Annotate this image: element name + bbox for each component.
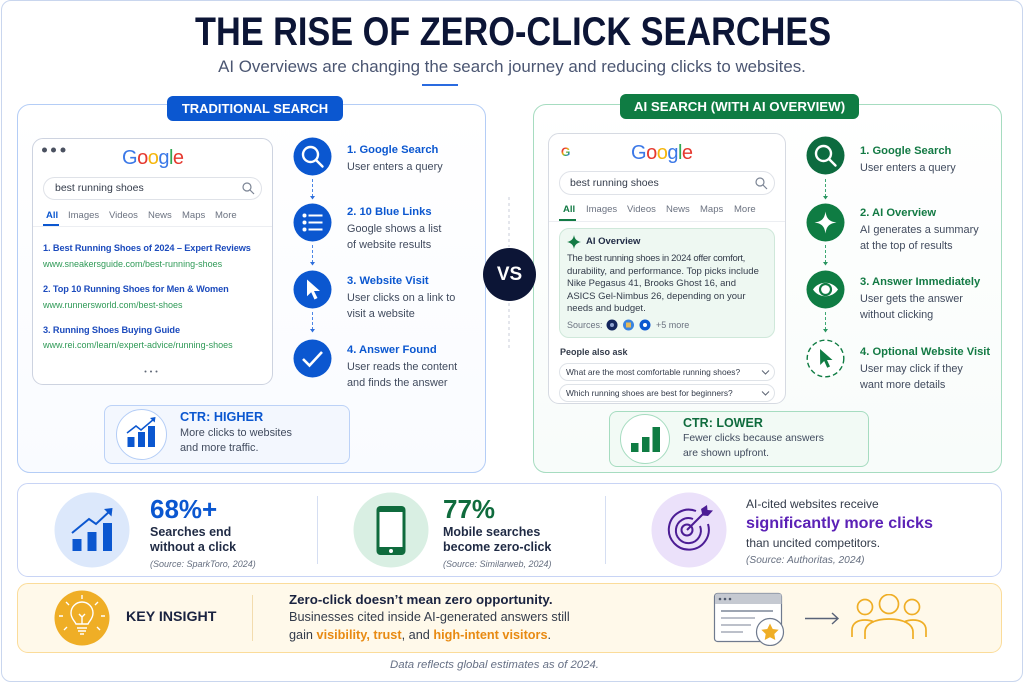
stat: 77%: become zero-click (443, 540, 551, 554)
stat: AI-cited clicks: (Source: Authoritas, 2024) (746, 555, 865, 566)
search box (43, 177, 262, 200)
subtitle: AI Overviews are changing the search journey and reducing clicks to websites. (218, 57, 806, 76)
step 4 text: 4. Answer Found (347, 344, 437, 356)
step 1 text (347, 144, 443, 173)
insight text: gain visibility, trust, and high-intent visitors. (289, 628, 551, 642)
stat: AI-cited clicks: significantly more clicks (746, 514, 933, 532)
step 3 text: 3. Website Visit (347, 275, 429, 287)
icon: AI step 4 optional cursor (806, 340, 844, 378)
results list: www.sneakersguide.com/best-running-shoes (43, 259, 222, 269)
AI step 1 text (860, 145, 956, 174)
sources row: Sources: (567, 320, 603, 330)
stat: AI-cited clicks (746, 497, 946, 567)
question 1: What are the most comfortable running shoes? (566, 367, 740, 377)
step 4 text: and finds the answer (347, 377, 448, 389)
CTR higher text: and more traffic. (180, 442, 258, 454)
icon: target (652, 492, 726, 568)
tabs: Maps (182, 210, 205, 221)
AI step 2 text: 2. AI Overview (860, 207, 936, 219)
results list: 1. Best Running Shoes of 2024 – Expert Reviews (43, 243, 251, 253)
AI overview card (559, 228, 775, 338)
AI overview text: needs and budget. (567, 303, 646, 314)
tabs: News (148, 210, 172, 221)
AI overview text: The best running shoes in 2024 offer comfort, (567, 253, 745, 264)
CTR lower text: Fewer clicks because answers (683, 433, 824, 444)
stat: AI-cited clicks: AI-cited websites receive (746, 497, 879, 511)
tabs: All (563, 204, 575, 215)
stat divider (605, 496, 606, 564)
step 1 text: 1. Google Search (347, 144, 438, 156)
results list: www.runnersworld.com/best-shoes (43, 300, 183, 310)
stat: 68%: Searches end (150, 525, 231, 539)
AI step 4 text: User may click if they (860, 363, 963, 375)
step 3 text: User clicks on a link to (347, 292, 455, 304)
step 4 text (347, 344, 458, 389)
icon: AI step 2 sparkle (806, 204, 844, 242)
icon: window dots (42, 148, 66, 152)
heading: AI search (620, 94, 859, 119)
icon: step 1 search (294, 138, 332, 176)
CTR higher text: More clicks to websites (180, 427, 292, 439)
VS divider line (508, 197, 510, 348)
VS badge (483, 248, 536, 301)
search box (559, 171, 775, 195)
heading: AI search: AI SEARCH (WITH AI OVERVIEW) (634, 99, 845, 114)
callout: CTR higher (104, 405, 350, 464)
Google logo: Google (122, 147, 184, 169)
VS badge: VS (497, 264, 522, 285)
AI step 3 text: User gets the answer (860, 293, 963, 305)
icon: AI step 1 search (806, 136, 844, 174)
insight text: Businesses cited inside AI-generated answers still (289, 610, 570, 624)
panel: key insight (17, 583, 1002, 653)
stat: 68%: 68%+ (150, 494, 217, 524)
panel: AI browser mockup (548, 133, 786, 404)
results list: www.rei.com/learn/expert-advice/running-shoes (43, 340, 233, 350)
results list: 3. Running Shoes Buying Guide (43, 325, 180, 335)
insight text: Zero-click doesn’t mean zero opportunity. (289, 592, 553, 607)
AI step 4 text (860, 346, 990, 391)
insight text (289, 593, 589, 645)
tabs: Maps (700, 204, 723, 215)
AI step 2 text (860, 207, 979, 252)
AI overview heading: AI Overview (586, 236, 640, 247)
icon: step 4 check (294, 340, 332, 378)
sources row: +5 more (656, 320, 689, 330)
AI step 3 text: 3. Answer Immediately (860, 276, 980, 288)
search query: best running shoes (55, 182, 144, 194)
icon: step 3 cursor (294, 270, 332, 308)
icon: small search (755, 177, 768, 190)
insight divider (252, 595, 253, 641)
stat: 77%: 77% (443, 494, 495, 524)
AI step 1 text: 1. Google Search (860, 145, 951, 157)
tabs: Images (586, 204, 617, 215)
icon: rising chart (116, 409, 167, 460)
AI step 4 text: 4. Optional Website Visit (860, 346, 990, 358)
icon: audience (849, 594, 929, 640)
stat: 77%: (Source: Similarweb, 2024) (443, 559, 552, 569)
question 2 (559, 384, 775, 402)
step 2 text (347, 206, 442, 251)
AI step 1 text: User enters a query (860, 162, 956, 174)
step 3 text: visit a website (347, 308, 415, 320)
step 2 text: Google shows a list (347, 223, 441, 235)
step 2 text: 2. 10 Blue Links (347, 206, 432, 218)
panel: statistics (17, 483, 1002, 577)
step 1 text: User enters a query (347, 161, 443, 173)
AI overview text: Nike Pegasus 41, Brooks Ghost 16, and (567, 278, 736, 289)
icon: small G: G (561, 145, 570, 159)
icon: AI star small (567, 235, 581, 249)
sources row (567, 320, 689, 330)
results list (43, 243, 251, 350)
tabs: More (215, 210, 237, 221)
stat: 68%: (Source: SparkToro, 2024) (150, 559, 256, 569)
AI step connectors (823, 179, 828, 332)
title accent line (422, 84, 458, 86)
icon: stat chart (54, 492, 130, 568)
AI step 2 text: AI generates a summary (860, 224, 979, 236)
question 2: Which running shoes are best for beginners? (566, 388, 733, 398)
traditional step connectors (310, 179, 315, 332)
tabs: Videos (627, 204, 656, 215)
step 2 text: of website results (347, 239, 431, 251)
tabs: News (666, 204, 690, 215)
AI step 3 text (860, 276, 980, 321)
stat: 77%: Mobile searches (443, 525, 540, 539)
step 3 text (347, 275, 455, 320)
panel: traditional browser mockup (32, 138, 273, 385)
stat: 68% (150, 494, 256, 569)
stat: AI-cited clicks: than uncited competitors. (746, 536, 880, 550)
search query: best running shoes (570, 177, 659, 189)
arrow (804, 611, 841, 626)
CTR lower text: are shown upfront. (683, 448, 769, 459)
CTR higher text: CTR: HIGHER (180, 410, 263, 424)
AI overview text: durability, and performance. Top picks include (567, 266, 759, 276)
icon: bars (620, 414, 670, 464)
tabs: More (734, 204, 756, 215)
panel: AI search (533, 104, 1002, 473)
icon: small search (242, 182, 254, 194)
callout: CTR lower (609, 411, 869, 467)
icon: AI step 3 eye (806, 270, 844, 308)
stat: 68%: without a click (150, 540, 236, 554)
tabs: Images (68, 210, 99, 221)
AI overview text (567, 253, 759, 314)
CTR higher text (180, 410, 292, 454)
key insight label: KEY INSIGHT (126, 609, 216, 625)
stat: 77% (443, 494, 552, 569)
AI step 4 text: want more details (860, 379, 945, 391)
people also ask: People also ask (560, 347, 628, 357)
more dots (144, 370, 158, 372)
Google logo: Google (631, 142, 693, 164)
heading: traditional search: TRADITIONAL SEARCH (182, 101, 328, 116)
stat divider (317, 496, 318, 564)
results list: 2. Top 10 Running Shoes for Men & Women (43, 284, 229, 294)
question 1 (559, 363, 775, 381)
step 4 text: User reads the content (347, 361, 457, 373)
icon: light bulb (54, 590, 110, 646)
icon: step 2 list (294, 204, 332, 242)
icon: cited webpage (713, 592, 785, 646)
AI step 2 text: at the top of results (860, 240, 953, 252)
heading: traditional search (167, 96, 343, 121)
title: THE RISE OF ZERO-CLICK SEARCHES (195, 10, 831, 54)
tabs: All (46, 210, 58, 221)
tabs: Videos (109, 210, 138, 221)
AI overview text: ASICS Gel-Nimbus 26, depending on your (567, 290, 746, 302)
panel: traditional search (17, 104, 486, 473)
footer note: Data reflects global estimates as of 2024. (390, 659, 599, 671)
CTR lower text: CTR: LOWER (683, 416, 763, 430)
CTR lower text (683, 416, 824, 459)
icon: phone (354, 492, 428, 568)
tabs (549, 204, 785, 222)
AI step 3 text: without clicking (860, 309, 933, 321)
tabs (33, 210, 272, 227)
